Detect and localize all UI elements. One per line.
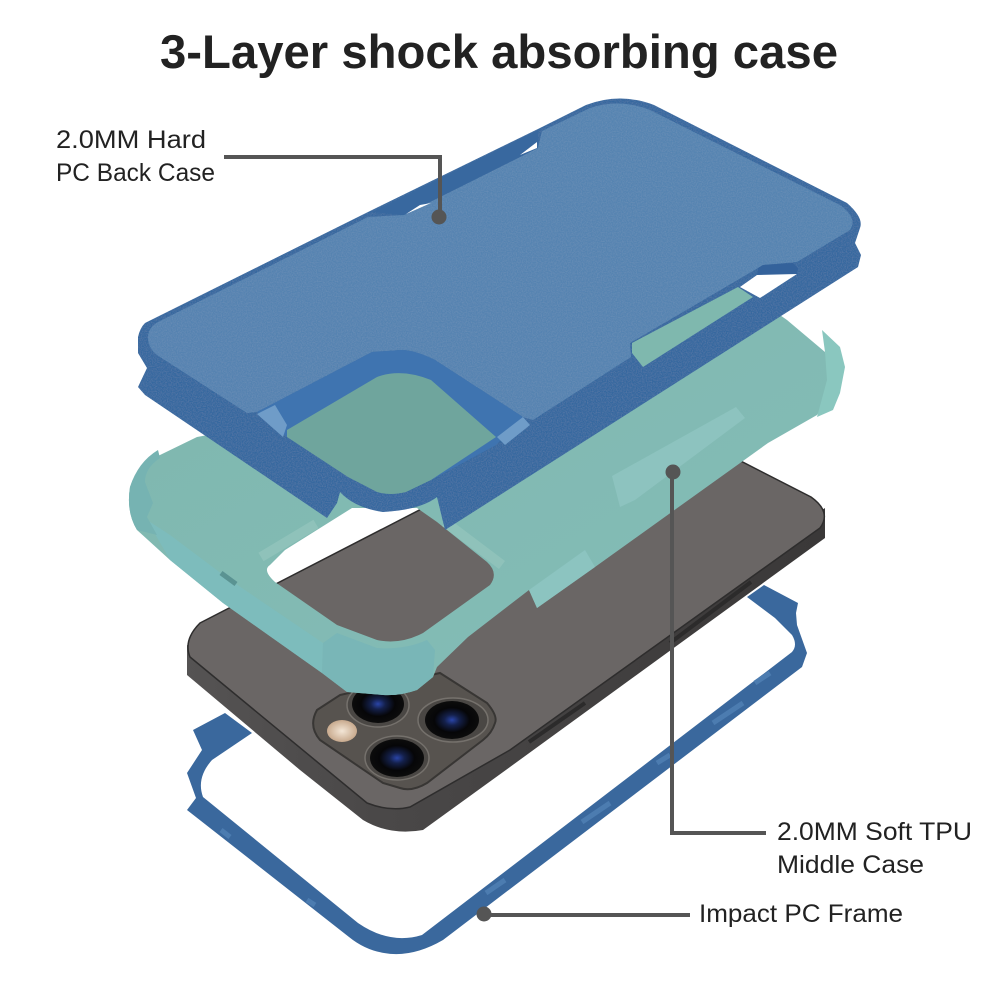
notch [757, 263, 798, 275]
callout: 2.0MM Hard PC Back Case: PC Back Case [56, 159, 215, 187]
phone [187, 417, 825, 832]
back face [148, 103, 852, 420]
raised clip centre [612, 407, 745, 507]
side buttons [529, 582, 751, 742]
right slot green [632, 287, 753, 367]
callout: Impact PC Frame [476, 900, 903, 928]
camera cut-out rim [257, 350, 523, 492]
raised clip lower [529, 550, 595, 608]
callout: 2.0MM Soft TPU Middle Case [666, 464, 972, 879]
lens bottom [365, 736, 429, 780]
callout: 2.0MM Soft TPU Middle Case: Middle Case [777, 851, 924, 879]
lens top [347, 683, 409, 727]
hard PC back case [138, 98, 861, 530]
camera island [313, 673, 496, 789]
side slot [221, 573, 236, 584]
top side slot [372, 130, 538, 215]
camera rim corner highlights [257, 405, 530, 445]
opening rim highlight [261, 522, 502, 565]
flash [327, 720, 357, 742]
top slot window [406, 142, 537, 214]
right slot window [740, 274, 797, 298]
callout: 2.0MM Hard PC Back Case [56, 126, 446, 224]
callout: Impact PC Frame: Impact PC Frame [699, 900, 903, 928]
title: 3-Layer shock absorbing case [160, 25, 838, 78]
soft TPU middle case [129, 287, 845, 695]
phone edge [187, 508, 825, 832]
outer shell [138, 98, 861, 530]
phone back [188, 417, 824, 809]
camera opening [287, 373, 496, 494]
impact PC frame ring [187, 585, 807, 954]
corner bumper [322, 633, 435, 695]
left wing [129, 450, 160, 535]
callout: 2.0MM Hard PC Back Case: 2.0MM Hard [56, 126, 206, 154]
callout: 2.0MM Soft TPU Middle Case: 2.0MM Soft TPU [777, 818, 972, 846]
right wing [817, 330, 845, 417]
lower side band [147, 520, 323, 673]
case body with camera opening [129, 287, 835, 695]
lens right [418, 698, 488, 742]
